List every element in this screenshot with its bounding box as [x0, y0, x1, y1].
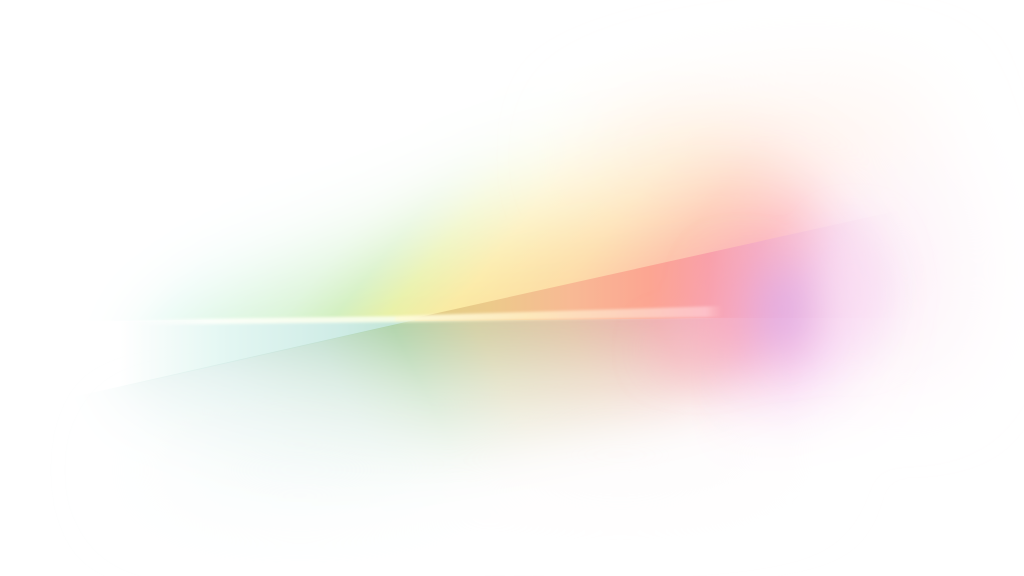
soft outer halo — [140, 77, 960, 495]
pink and violet glow at right end — [655, 230, 887, 366]
spectrum light illustration — [122, 83, 942, 476]
diagonal wedge of saturated colour — [415, 209, 905, 321]
horizontal light streak — [125, 306, 722, 325]
lower reflection of the spectrum — [126, 318, 774, 461]
upper fan of colour — [140, 111, 876, 426]
pale teal band between streak and diagonal — [0, 320, 415, 401]
